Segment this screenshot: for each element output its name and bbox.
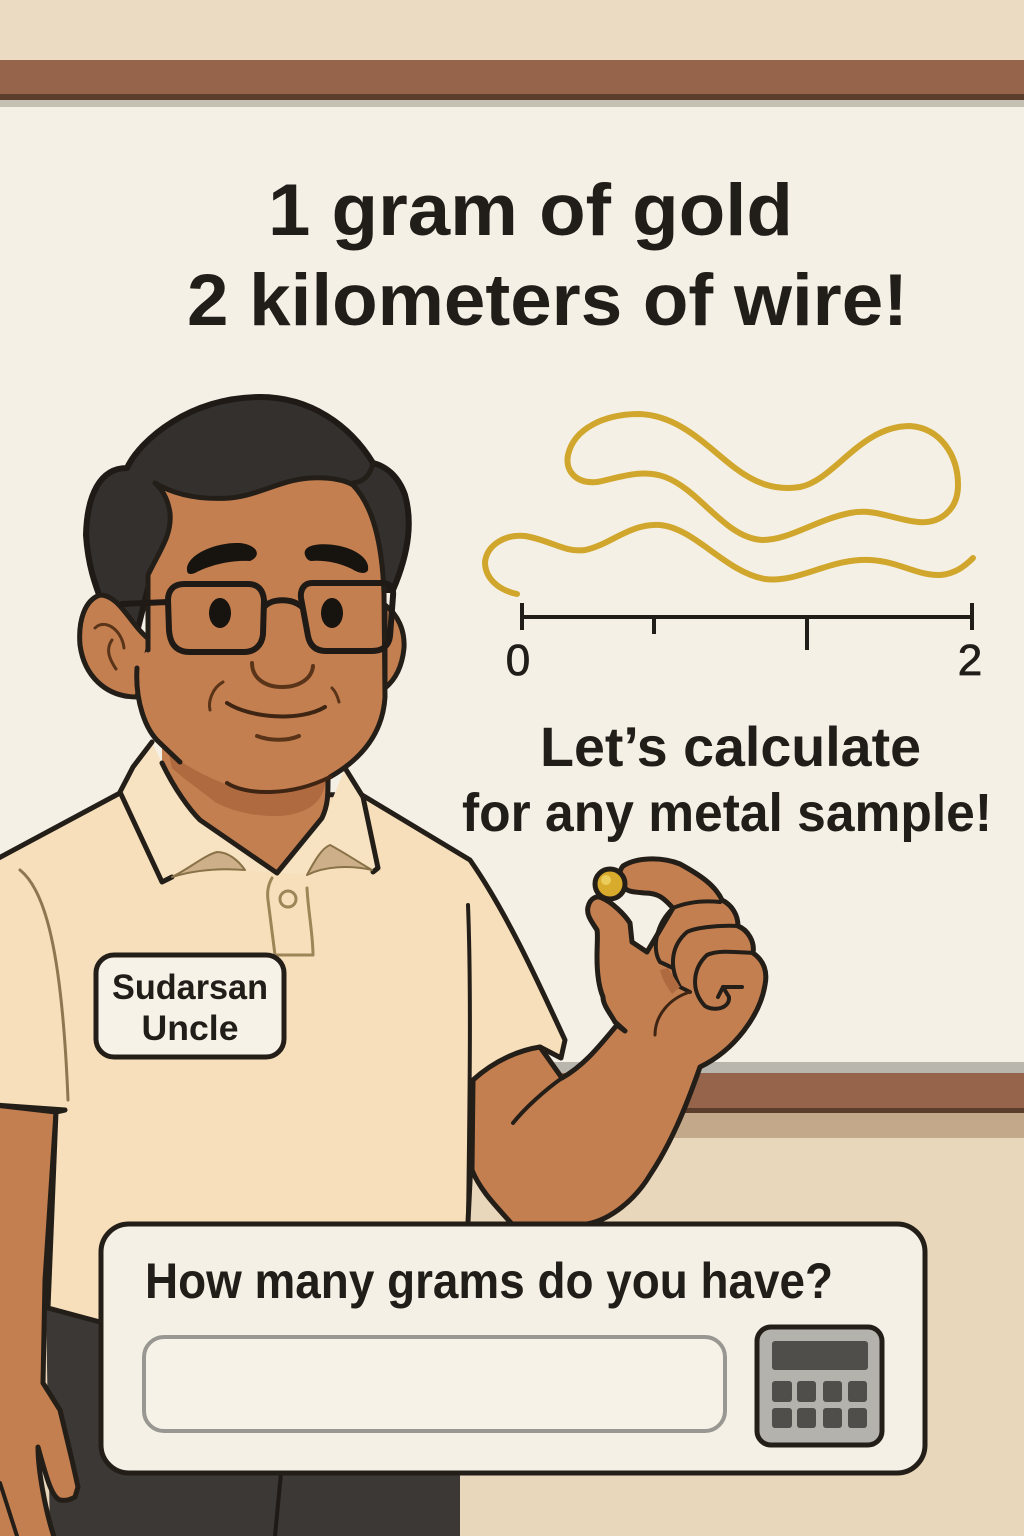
right forearm and hand bbox=[472, 859, 766, 1224]
gold wire bbox=[485, 414, 973, 594]
mouth bbox=[210, 682, 339, 740]
input field bbox=[144, 1337, 725, 1431]
name tag: Sudarsan bbox=[112, 968, 268, 1007]
shirt placket and button bbox=[268, 878, 313, 955]
neck bbox=[162, 745, 328, 873]
nose bbox=[252, 663, 313, 687]
trousers bbox=[46, 1308, 460, 1536]
gold nugget bbox=[595, 869, 625, 899]
hair back bbox=[86, 397, 409, 640]
trouser seam bbox=[275, 1473, 281, 1536]
title: 1 gram of gold bbox=[268, 170, 793, 251]
title: 2 kilometers of wire! bbox=[187, 260, 908, 341]
input panel bbox=[101, 1224, 925, 1473]
collar bbox=[120, 742, 378, 882]
subheading bbox=[462, 715, 992, 843]
shirt bbox=[0, 793, 565, 1325]
left arm and hand bbox=[0, 1105, 78, 1536]
panel question: How many grams do you have? bbox=[145, 1253, 833, 1309]
whiteboard bbox=[0, 60, 1024, 1138]
glasses bbox=[122, 583, 393, 652]
ears bbox=[80, 595, 404, 697]
subheading: Let’s calculate bbox=[540, 715, 921, 778]
distance scale bbox=[506, 603, 982, 685]
eyebrows bbox=[187, 543, 368, 574]
finger lines bbox=[656, 901, 753, 1009]
title bbox=[187, 170, 908, 341]
icon: calculator bbox=[757, 1327, 882, 1445]
distance scale: 2 bbox=[958, 636, 982, 685]
teacher character bbox=[0, 397, 766, 1536]
name tag bbox=[96, 955, 284, 1057]
subheading: for any metal sample! bbox=[462, 783, 992, 843]
distance scale: 0 bbox=[506, 636, 530, 685]
eyes bbox=[209, 598, 343, 628]
name tag: Uncle bbox=[142, 1009, 238, 1048]
face bbox=[137, 463, 385, 793]
